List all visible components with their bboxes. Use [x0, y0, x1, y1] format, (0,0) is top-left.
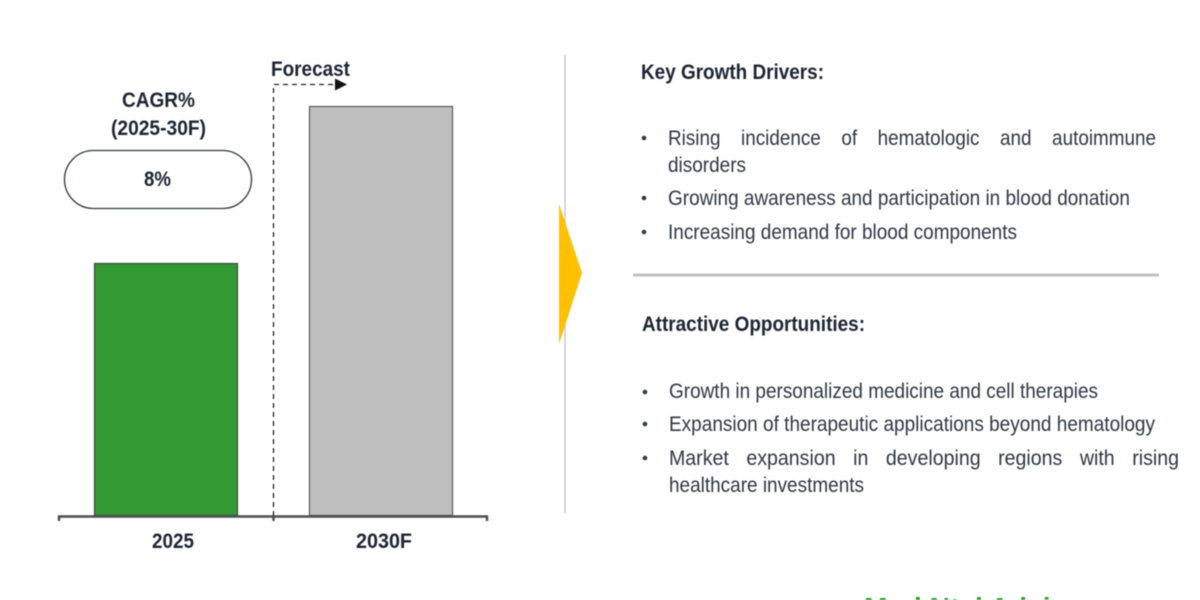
CAGR value: 8%: [144, 168, 171, 191]
opportunities list: [643, 380, 1179, 497]
driver 3: Increasing demand for blood components: [668, 221, 1017, 244]
CAGR pill: [64, 150, 252, 208]
CAGR heading: CAGR%: [122, 89, 195, 112]
bullet: [642, 196, 646, 200]
panel: key growth drivers: [641, 61, 1156, 244]
vertical divider: [564, 55, 566, 513]
opportunity 3 line 1: Market expansion in developing regions with rising: [669, 447, 1179, 470]
arrow head: [335, 78, 347, 90]
bullet: [643, 456, 647, 460]
CAGR period: (2025-30F): [111, 117, 206, 140]
bar: 2025: [94, 264, 238, 516]
driver 1 line 2: disorders: [668, 154, 746, 177]
chart axis: [59, 516, 487, 521]
bar: 2030F: [310, 106, 452, 516]
label: 2030F: 2030F: [356, 530, 412, 553]
CAGR callout: [64, 89, 252, 208]
driver 1 line 1: Rising incidence of hematologic and autoimmune: [668, 127, 1156, 150]
bullet: [642, 230, 646, 234]
label: 2025: 2025: [152, 530, 194, 553]
horizontal divider: [633, 274, 1159, 276]
bullet: [643, 390, 647, 394]
driver 2: Growing awareness and participation in blood donation: [668, 187, 1130, 210]
opportunity 2: Expansion of therapeutic applications beyond hematology: [669, 413, 1155, 436]
bullet: [643, 422, 647, 426]
bullet: [642, 136, 646, 140]
opportunity 3 line 2: healthcare investments: [669, 474, 864, 497]
yellow chevron arrow: [559, 204, 582, 344]
opportunity 1: Growth in personalized medicine and cell therapies: [669, 380, 1098, 403]
forecast label: Forecast: [271, 58, 350, 81]
bar chart: [59, 106, 487, 553]
forecast marker: [271, 58, 350, 516]
heading: key growth drivers: Key Growth Drivers:: [641, 61, 824, 84]
drivers list: [642, 127, 1156, 244]
panel: attractive opportunities: [642, 313, 1179, 497]
heading: attractive opportunities: Attractive Opportunities:: [642, 313, 865, 336]
forecast dashed bracket: [274, 84, 335, 516]
